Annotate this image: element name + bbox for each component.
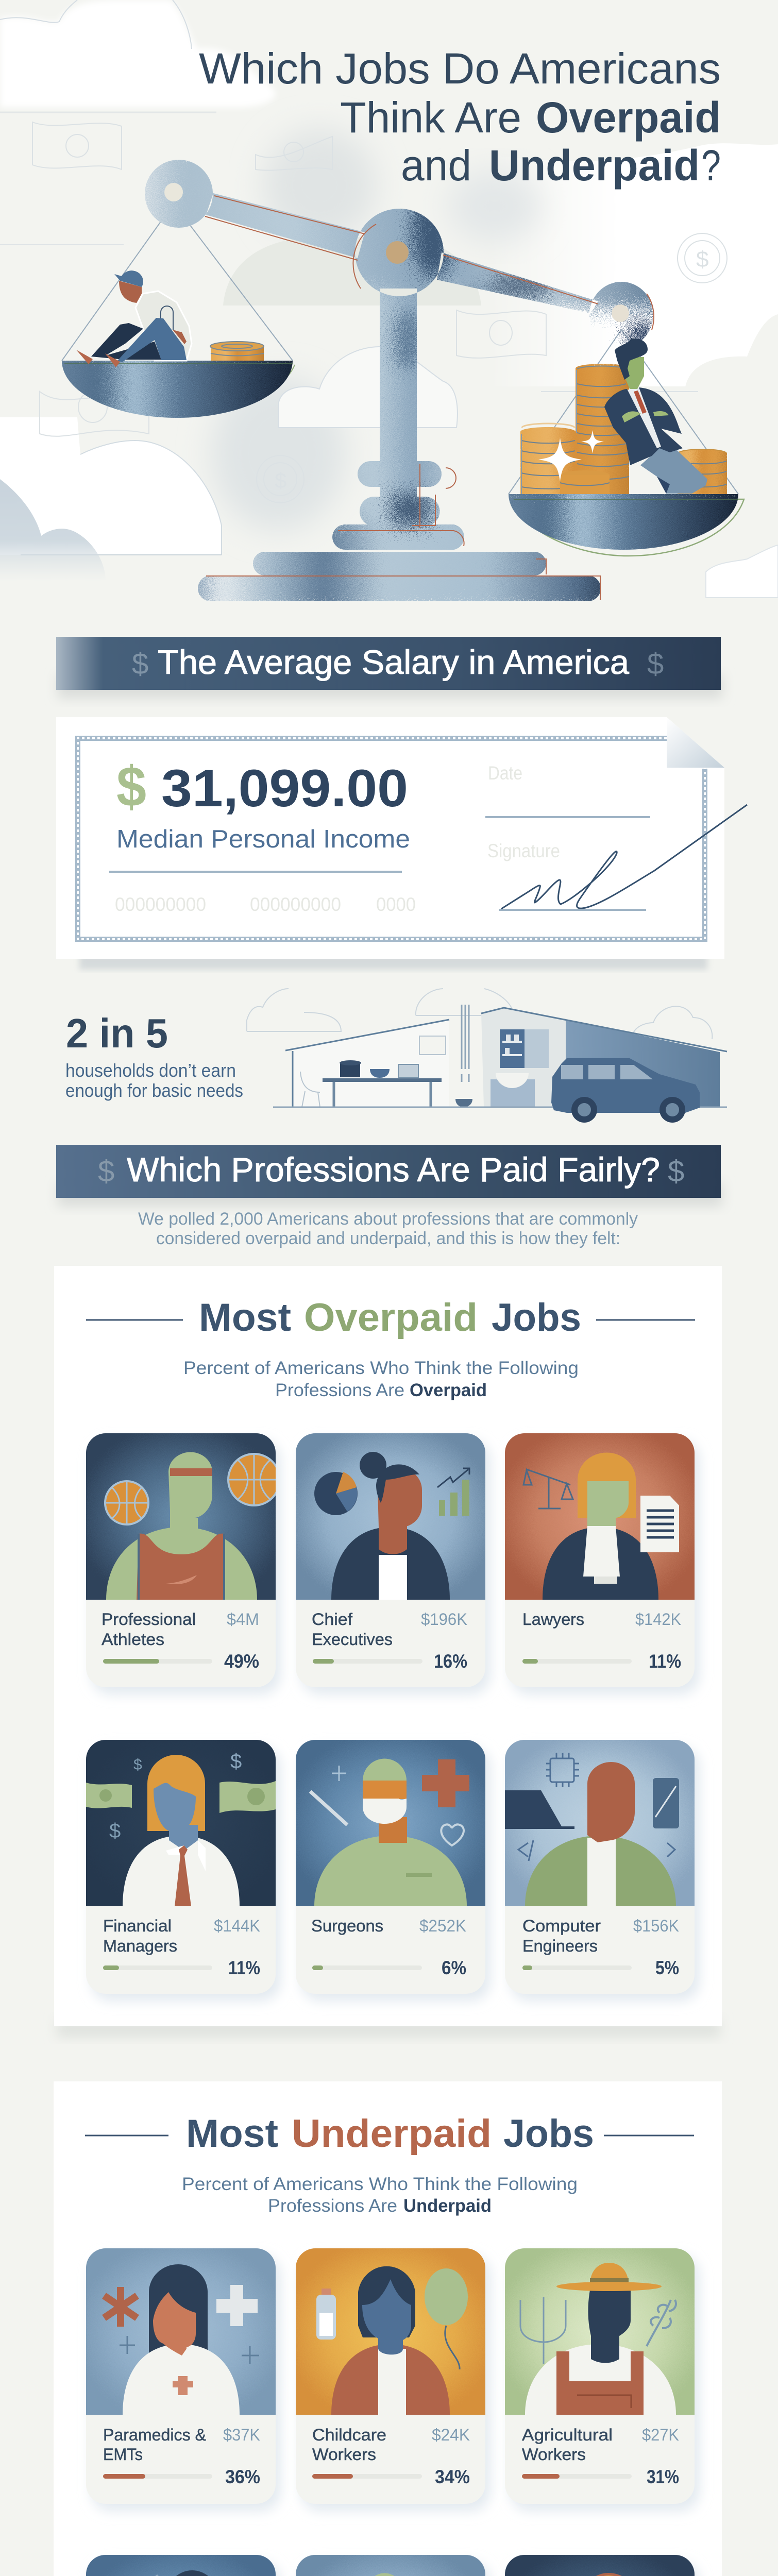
median personal income label: Median Personal Income <box>116 825 410 853</box>
salary: $37K <box>223 2426 260 2444</box>
check shadow <box>79 953 707 970</box>
right wing of house <box>481 1008 566 1107</box>
illustration: paramedic <box>76 2238 286 2425</box>
heading: most underpaid jobs: Jobs <box>503 2112 594 2156</box>
bar 49% <box>103 1659 212 1664</box>
title: and <box>401 141 471 190</box>
signature label: Signature <box>487 840 560 861</box>
subheading overpaid: Overpaid <box>410 1380 487 1400</box>
illustration: executive <box>296 1433 485 1600</box>
account digits <box>115 894 416 915</box>
title: Think Are <box>340 93 521 142</box>
bar 5% <box>522 1965 632 1970</box>
illustration: computer engineer <box>495 1730 705 1917</box>
left person sitting <box>76 270 192 367</box>
car <box>551 1058 700 1123</box>
salary: $24K <box>432 2426 470 2444</box>
right pan <box>509 494 745 556</box>
name <box>312 1610 393 1649</box>
folded corner <box>667 717 724 768</box>
amount: $ <box>116 755 146 819</box>
heading: most overpaid jobs: Most <box>199 1296 291 1340</box>
card: paramedics and EMTs <box>76 2238 286 2511</box>
subheading overpaid: Percent of Americans Who Think the Following <box>183 1358 579 1378</box>
cabinet and shelf window <box>500 1029 549 1068</box>
name: Professional <box>102 1610 196 1629</box>
heading: most underpaid jobs: Most <box>186 2112 278 2156</box>
card: elementary and middle school teachers <box>76 2545 286 2576</box>
salary: $142K <box>635 1610 681 1629</box>
banner: which professions are paid fairly <box>56 1145 722 1206</box>
subheading overpaid <box>183 1358 579 1400</box>
name: Chief <box>312 1610 352 1629</box>
card: agricultural workers <box>495 2238 705 2511</box>
counter and sink <box>491 1073 535 1107</box>
background clouds and money notes: $ <box>275 468 286 493</box>
name: Computer <box>522 1917 601 1935</box>
subheading underpaid: Underpaid <box>403 2196 492 2216</box>
banner: the average salary in America <box>56 637 722 698</box>
percent: 31% <box>647 2466 679 2487</box>
amount: 31,099.00 <box>161 759 408 818</box>
salary: $196K <box>421 1610 467 1629</box>
percent: 34% <box>435 2466 470 2487</box>
name <box>103 2426 206 2464</box>
account digits: 000000000 <box>250 894 341 915</box>
subheading underpaid: Percent of Americans Who Think the Following <box>182 2174 578 2194</box>
bar 11% <box>522 1659 632 1664</box>
check lines <box>109 817 650 910</box>
panel: most underpaid jobs <box>54 2081 722 2576</box>
outline clouds <box>247 989 712 1039</box>
illustration: financial manager <box>86 1740 276 1906</box>
illustration: childcare worker <box>285 2238 496 2425</box>
stat: 2 in 5 households: 2 in 5 <box>66 1010 168 1056</box>
salary: $144K <box>214 1917 260 1935</box>
percent: 5% <box>655 1957 679 1978</box>
illustration: financial manager: $ <box>133 1756 142 1773</box>
stat: 2 in 5 households: enough for basic needs <box>65 1080 243 1101</box>
name: Financial <box>103 1917 172 1935</box>
guilloche border <box>78 738 705 939</box>
banner: which professions are paid fairly: Which Professions Are Paid Fairly? <box>127 1150 660 1189</box>
wall picture <box>419 1036 446 1055</box>
hanging lamp lines and bowl <box>455 1005 472 1107</box>
left pan <box>62 361 295 418</box>
bar 11% <box>103 1965 212 1970</box>
name: Athletes <box>102 1630 164 1649</box>
name <box>522 1917 601 1955</box>
illustration: teacher <box>76 2545 286 2576</box>
right person leaning <box>604 338 707 494</box>
heading: most overpaid jobs <box>86 1296 695 1340</box>
name <box>102 1610 196 1649</box>
banner: the average salary in America: The Average Salary in America <box>158 643 629 681</box>
card: customer service representatives <box>495 2545 705 2576</box>
hero illustration: scale of salaries <box>0 0 778 613</box>
illustration: waiter <box>285 2545 496 2576</box>
name: Lawyers <box>522 1610 584 1629</box>
bar 6% <box>312 1965 422 1970</box>
bar 31% <box>522 2474 632 2479</box>
rust accent outlines <box>205 196 654 600</box>
title: Overpaid <box>536 93 721 142</box>
heading: most overpaid jobs: Overpaid <box>304 1296 478 1340</box>
scale beam, post and base <box>145 160 653 601</box>
title: Underpaid <box>489 141 700 190</box>
percent: 49% <box>224 1651 259 1672</box>
survey intro text <box>138 1209 638 1248</box>
left wing of house <box>293 1020 449 1107</box>
salary: $27K <box>642 2426 679 2444</box>
banner: the average salary in America: $ <box>647 647 664 681</box>
ground line <box>273 1107 727 1108</box>
illustration: house and car <box>247 989 727 1123</box>
sparkles <box>538 430 604 481</box>
scale holes <box>164 183 629 322</box>
subheading underpaid <box>182 2174 578 2216</box>
name: Workers <box>522 2445 586 2464</box>
right coin stacks <box>520 364 727 494</box>
card: waiters and waitresses <box>285 2545 496 2576</box>
illustration: financial manager: $ <box>230 1750 242 1773</box>
account digits: 0000 <box>376 894 416 915</box>
bar 36% <box>103 2474 212 2479</box>
illustration: customer service rep <box>495 2545 705 2576</box>
card: surgeons <box>285 1730 496 2001</box>
salary: $4M <box>227 1610 259 1629</box>
card: computer engineers <box>495 1730 705 2001</box>
illustration: surgeon <box>285 1730 496 1917</box>
heading: most underpaid jobs: Underpaid <box>292 2112 492 2156</box>
illustration: agricultural worker <box>495 2238 705 2425</box>
name <box>312 2426 386 2464</box>
heading: most overpaid jobs: Jobs <box>492 1296 581 1340</box>
bar 16% <box>313 1659 422 1664</box>
chair <box>300 1072 320 1107</box>
survey intro text: We polled 2,000 Americans about professions that are commonly <box>138 1209 638 1229</box>
name: Executives <box>312 1630 393 1649</box>
name: Engineers <box>522 1937 598 1955</box>
name: Workers <box>312 2445 376 2464</box>
check paper <box>56 717 724 959</box>
title <box>199 44 721 190</box>
percent: 11% <box>649 1651 681 1672</box>
name: Agricultural <box>522 2426 613 2444</box>
stat: 2 in 5 households: households don’t earn <box>65 1060 236 1081</box>
subheading underpaid: Professions Are <box>268 2196 397 2216</box>
percent: 16% <box>434 1651 467 1672</box>
illustration: athlete <box>86 1433 276 1600</box>
card: chief executives <box>285 1423 496 1694</box>
banner: the average salary in America: $ <box>132 647 148 681</box>
left coin stack <box>210 342 264 361</box>
panel: most overpaid jobs <box>54 1266 722 2037</box>
percent: 11% <box>228 1957 260 1978</box>
card: financial managers <box>76 1730 286 2001</box>
banner: which professions are paid fairly: $ <box>98 1155 114 1188</box>
card: childcare workers <box>285 2238 496 2511</box>
bar 34% <box>312 2474 422 2479</box>
banner: which professions are paid fairly: $ <box>668 1155 684 1188</box>
heading: most underpaid jobs <box>85 2112 694 2156</box>
stat: 2 in 5 households <box>65 1010 243 1101</box>
name: Managers <box>103 1937 177 1955</box>
scale strings <box>62 204 738 494</box>
name: Surgeons <box>311 1917 383 1935</box>
name <box>522 2426 613 2464</box>
title: ? <box>701 141 721 190</box>
background clouds and money notes: $ <box>696 247 708 272</box>
salary: $252K <box>419 1917 466 1935</box>
title: Which Jobs Do Americans <box>199 44 721 93</box>
salary: $156K <box>633 1917 679 1935</box>
percent: 6% <box>442 1957 466 1978</box>
name <box>103 1917 177 1955</box>
check panel <box>56 717 747 970</box>
signature scrawl <box>501 805 747 909</box>
name: Paramedics & <box>103 2426 206 2444</box>
subheading overpaid: Professions Are <box>275 1380 404 1400</box>
card: lawyers <box>495 1423 705 1694</box>
card: professional athletes <box>76 1423 286 1694</box>
name: EMTs <box>103 2445 143 2464</box>
survey intro text: considered overpaid and underpaid, and this is how they felt: <box>156 1229 620 1248</box>
date label: Date <box>488 762 522 784</box>
name: Childcare <box>312 2426 386 2444</box>
illustration: lawyer <box>505 1433 695 1600</box>
table and cookware <box>323 1060 442 1107</box>
account digits: 000000000 <box>115 894 206 915</box>
background clouds and money notes <box>0 0 778 598</box>
percent: 36% <box>225 2466 260 2487</box>
illustration: financial manager: $ <box>109 1820 121 1842</box>
